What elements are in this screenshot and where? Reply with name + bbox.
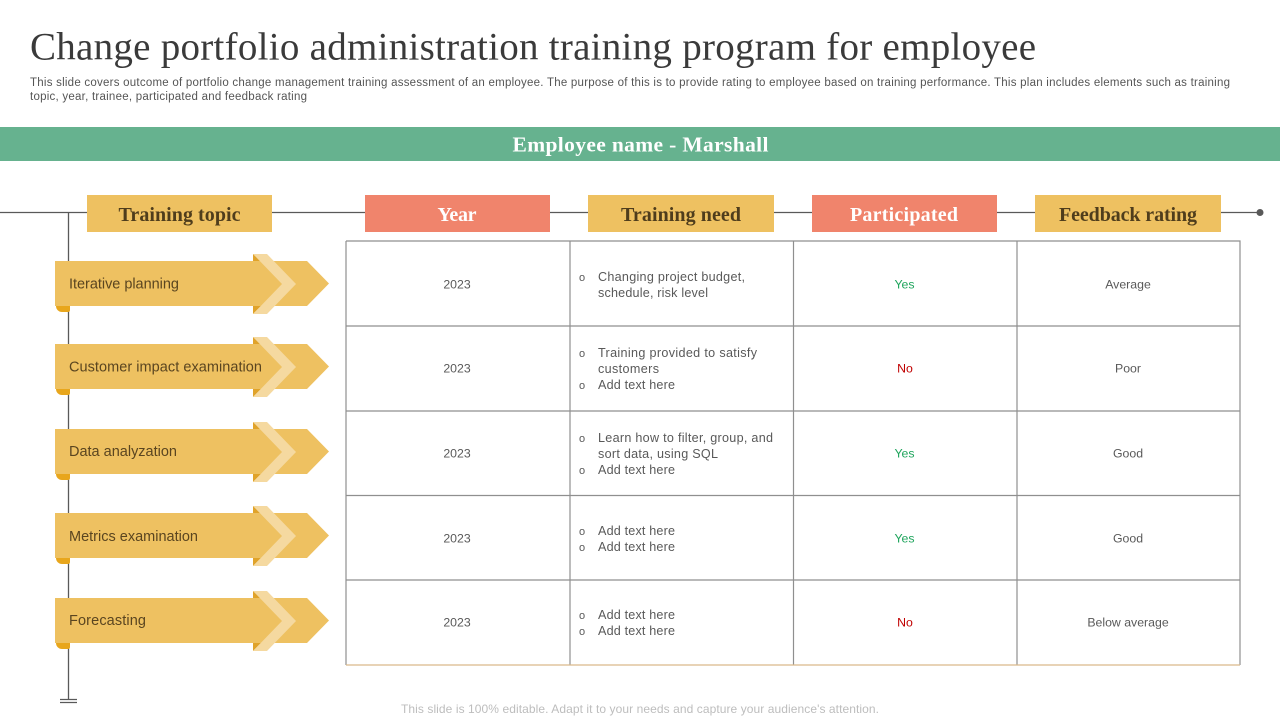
header: year: Year bbox=[438, 204, 477, 226]
footer note: This slide is 100% editable. Adapt it to your needs and capture your audience's attention. bbox=[401, 702, 879, 716]
table row 5: 2023 bbox=[443, 616, 471, 630]
topic arrow: data analyzation bbox=[55, 422, 329, 482]
banner: employee name: Employee name - Marshall bbox=[512, 132, 769, 156]
table row 2: o bbox=[579, 380, 585, 392]
subtitle description bbox=[30, 77, 1230, 103]
timeline connector bbox=[0, 209, 1264, 702]
title: Change portfolio administration training program for employee bbox=[30, 26, 1036, 68]
table row 4 bbox=[443, 524, 1143, 554]
table row 3: 2023 bbox=[443, 446, 471, 460]
table row 2 bbox=[443, 346, 1141, 392]
table row 2: Training provided to satisfy bbox=[598, 346, 758, 360]
table row 4: Add text here bbox=[598, 524, 675, 538]
topic arrow: customer impact examination bbox=[55, 337, 329, 397]
table row 4: Yes bbox=[894, 532, 915, 546]
table row 4: o bbox=[579, 526, 585, 538]
table row 3: Yes bbox=[894, 446, 915, 460]
table row 4: Good bbox=[1113, 532, 1143, 546]
topic arrow: iterative planning: Iterative planning bbox=[69, 276, 179, 292]
topic arrow: data analyzation: Data analyzation bbox=[69, 444, 177, 460]
table row 5: o bbox=[579, 626, 585, 638]
topic arrow: metrics examination: Metrics examination bbox=[69, 529, 198, 545]
table row 3: Good bbox=[1113, 446, 1143, 460]
table row 1: o bbox=[579, 272, 585, 284]
table row 3: o bbox=[579, 465, 585, 477]
table row 5: No bbox=[897, 616, 913, 630]
table row 5: Add text here bbox=[598, 624, 675, 638]
table row 2: No bbox=[897, 362, 913, 376]
topic arrow: metrics examination bbox=[55, 506, 329, 566]
topic arrow: forecasting: Forecasting bbox=[69, 613, 146, 629]
table row 1: 2023 bbox=[443, 278, 471, 292]
table row 5: Add text here bbox=[598, 608, 675, 622]
topic arrow: customer impact examination: Customer impact examination bbox=[69, 360, 262, 376]
header: training need: Training need bbox=[621, 204, 741, 226]
table row 1: Average bbox=[1105, 278, 1151, 292]
header: feedback rating: Feedback rating bbox=[1059, 204, 1197, 226]
table grid bbox=[346, 241, 1240, 665]
table row 3: sort data, using SQL bbox=[598, 447, 718, 461]
table row 2: Add text here bbox=[598, 378, 675, 392]
table row 2: customers bbox=[598, 362, 659, 376]
header: participated bbox=[812, 195, 997, 232]
table row 4: Add text here bbox=[598, 540, 675, 554]
header: year bbox=[365, 195, 550, 232]
table row 4: 2023 bbox=[443, 532, 471, 546]
header: training topic bbox=[87, 195, 272, 232]
header: feedback rating bbox=[1035, 195, 1221, 232]
table row 4: o bbox=[579, 542, 585, 554]
table row 5: o bbox=[579, 610, 585, 622]
table bbox=[346, 241, 1240, 665]
table row 1: schedule, risk level bbox=[598, 286, 708, 300]
table row 2: o bbox=[579, 348, 585, 360]
header: training topic: Training topic bbox=[118, 204, 241, 226]
banner: employee name bbox=[0, 127, 1280, 161]
table row 3: Learn how to filter, group, and bbox=[598, 431, 773, 445]
subtitle description: This slide covers outcome of portfolio change management training assessment of an employee. The purpose of this is to provide rating to employee based on training performance. This plan includes elements such as training bbox=[30, 77, 1230, 89]
table row 3: Add text here bbox=[598, 463, 675, 477]
table row 3: o bbox=[579, 433, 585, 445]
table row 2: 2023 bbox=[443, 362, 471, 376]
table row 5: Below average bbox=[1087, 616, 1169, 630]
table row 1 bbox=[443, 270, 1151, 300]
header: participated: Participated bbox=[850, 204, 958, 226]
topic arrow: forecasting bbox=[55, 591, 329, 651]
topic arrow: iterative planning bbox=[55, 254, 329, 314]
table row 1: Changing project budget, bbox=[598, 270, 745, 284]
table row 3 bbox=[443, 431, 1143, 477]
header: training need bbox=[588, 195, 774, 232]
subtitle description: topic, year, trainee, participated and feedback rating bbox=[30, 91, 307, 103]
table row 5 bbox=[443, 608, 1169, 638]
column headers bbox=[87, 195, 1221, 232]
table row 2: Poor bbox=[1115, 362, 1141, 376]
table row 1: Yes bbox=[894, 278, 915, 292]
